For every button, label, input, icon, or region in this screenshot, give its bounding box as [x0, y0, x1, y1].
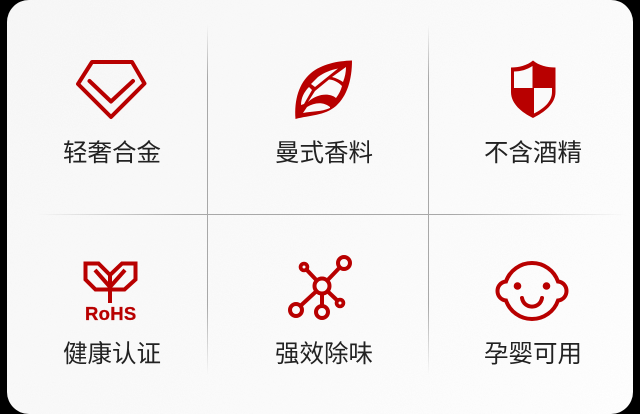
label: 孕婴可用: 孕婴可用	[484, 341, 582, 368]
icon: diamond	[78, 62, 144, 117]
icon: leaf	[295, 60, 352, 119]
label: 曼式香料: 曼式香料	[275, 140, 373, 167]
RoHS text: RoHS	[85, 303, 137, 324]
label: 不含酒精: 不含酒精	[484, 140, 582, 167]
icon: RoHS leaves	[85, 264, 137, 324]
icon: shield	[511, 60, 556, 118]
label: 轻奢合金: 轻奢合金	[63, 140, 161, 167]
icon: baby face	[498, 263, 566, 319]
label: 健康认证: 健康认证	[63, 341, 161, 368]
icon: molecule network	[290, 257, 350, 318]
label: 强效除味: 强效除味	[275, 341, 373, 368]
